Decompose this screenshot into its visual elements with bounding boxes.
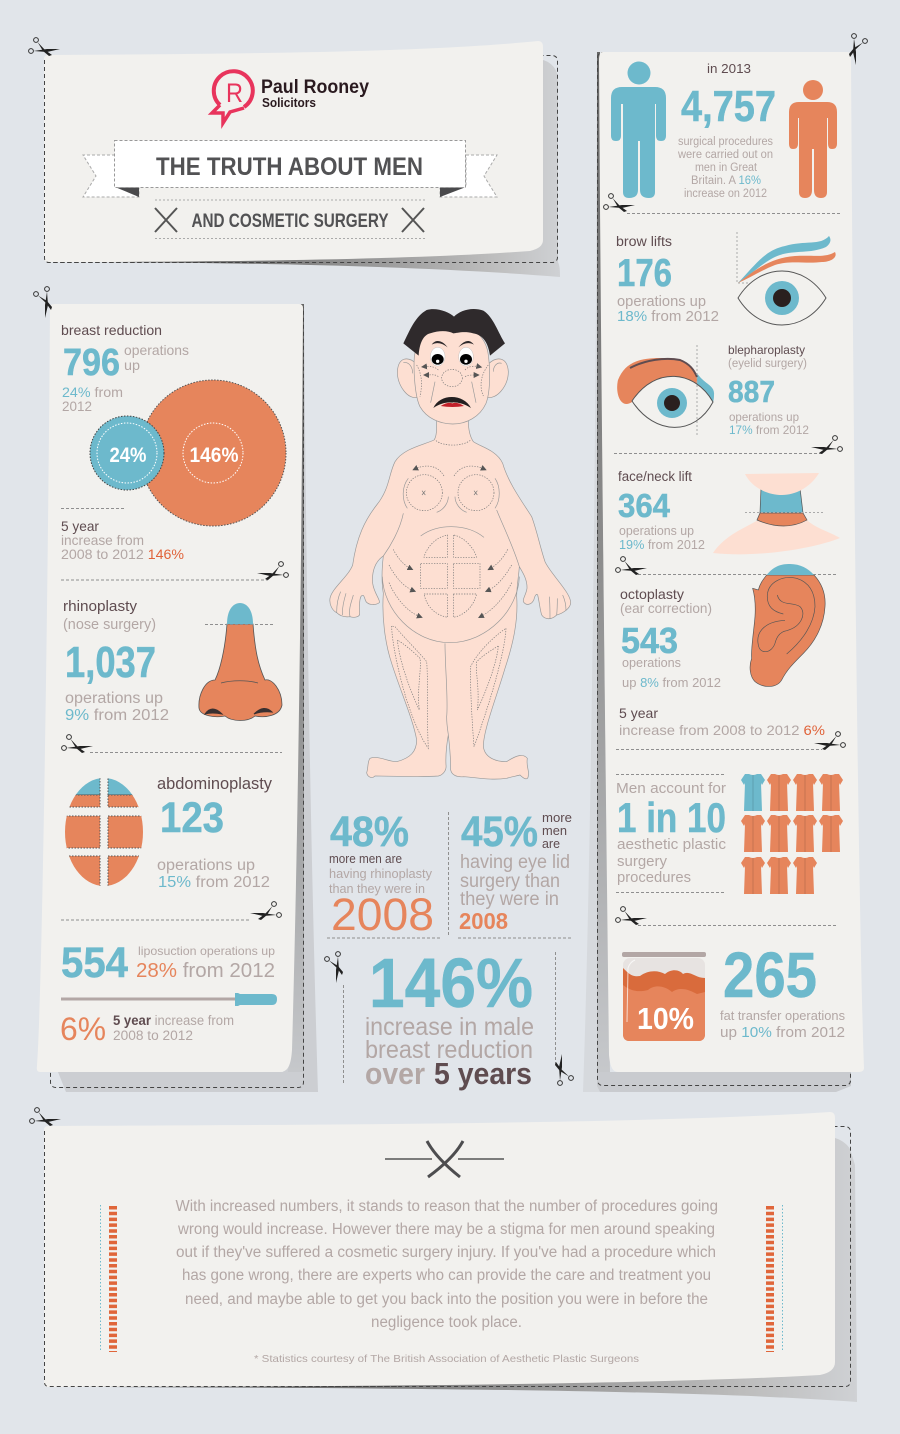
conclusion text: out if they've suffered a cosmetic surgery injury. If you've had a procedure which [176,1244,716,1261]
stat: 146%: 5 years [434,1056,532,1091]
icon: fat jar [622,952,706,1041]
stat: 45% eye lid: are [542,837,560,851]
liposuction stat: liposuction operations up [138,944,275,958]
stat: 48% rhinoplasty: having rhinoplasty [329,866,432,881]
ear 5 year stat [619,705,825,738]
blepharoplasty stat: (eyelid surgery) [728,358,807,370]
stat: 48% rhinoplasty: 2008 [331,889,434,940]
head [414,324,490,424]
breast reduction stat: 24% from [62,384,123,400]
conclusion dashed left and bottom edge [44,1131,400,1386]
venn circles: 146% [190,444,239,467]
conclusion text: With increased numbers, it stands to reason that the number of procedures going [176,1198,718,1215]
figure: man [330,309,571,779]
icon: ear [750,564,825,686]
icon: crossed scalpels [385,1141,504,1177]
liposuction 5 year: 6% [60,1011,106,1047]
breast reduction stat: 2012 [62,398,92,414]
left paper edge shadow [288,304,304,1072]
conclusion text: wrong would increase. However there may be a stigma for men around speaking [177,1221,715,1238]
icon: gown grid [741,774,843,894]
octoplasty stat: 543 [621,620,678,661]
scissors [616,907,647,925]
panel: header [29,38,560,277]
brow lifts stat: 18% from 2012 [617,309,719,325]
ear 5 year stat: increase from 2008 to 2012 6% [619,722,825,738]
scissors [814,732,845,750]
abdominoplasty stat: 15% from 2012 [158,874,270,891]
octoplasty stat: operations [622,655,681,670]
brow lifts stat [616,234,719,325]
octoplasty stat [620,586,721,690]
scissors [555,1054,573,1085]
octoplasty stat: octoplasty [620,586,684,602]
right paper [599,52,864,1072]
panel: left statistics [34,287,318,1092]
left dashed outline [50,304,304,1088]
side stitches right [770,1205,782,1352]
scissors [604,194,635,212]
face/neck lift stat [618,469,705,552]
stat: 45% eye lid: having eye lid [460,852,570,873]
octoplasty stat: up 8% from 2012 [622,675,721,690]
subtitle [155,200,425,238]
face/neck lift stat: face/neck lift [618,469,692,484]
title ribbon: THE TRUTH ABOUT MEN [156,153,423,181]
fat transfer stat: 265 [723,939,817,1011]
1 in 10 stat: surgery [617,853,667,870]
header dashed outline [44,56,558,262]
1 in 10 stat: procedures [617,869,691,886]
left paper [37,304,303,1072]
venn circles: 24% [110,444,147,467]
conclusion text: has gone wrong, there are experts who can provide the care and treatment you [182,1267,711,1284]
breast reduction stat [61,322,189,414]
scissors [616,557,647,575]
face/neck lift stat: operations up [619,524,694,538]
abdominoplasty stat [157,775,273,891]
liposuction 5 year [60,1011,234,1047]
icon: Paul Rooney logo: R [226,78,243,108]
5 year stat: 5 year [61,518,99,534]
header paper [44,41,543,262]
right paper edge shadow [597,52,610,1072]
eyes [430,341,474,366]
in 2013 stat: increase on 2012 [684,188,767,200]
scissors [250,902,281,920]
icon: Paul Rooney logo: Paul Rooney [261,77,369,98]
icon: abdomen [65,778,143,886]
fat transfer stat: up 10% from 2012 [720,1024,845,1041]
right paper shadow [597,1072,851,1092]
icon: Paul Rooney logo [212,71,369,123]
icon: neck [713,473,840,554]
scissors top [849,34,867,65]
icon: blepharoplasty eye [617,345,714,435]
conclusion text [176,1198,718,1331]
scissors [325,952,343,983]
scissors [811,436,842,454]
icon: blue man [611,62,666,198]
scissors [30,1108,61,1126]
face/neck lift stat: 19% from 2012 [619,538,705,552]
icon: Paul Rooney logo: Solicitors [262,96,316,110]
header dashed left and bottom edge [44,60,300,262]
conclusion dashed outline [44,1126,850,1386]
octoplasty stat: (ear correction) [620,600,712,616]
stat: 45% eye lid: 45% [461,808,538,856]
in 2013 stat: in 2013 [707,61,751,76]
1 in 10 stat: 1 in 10 [617,794,726,841]
breast reduction stat: 796 [63,342,120,384]
mouth [433,397,471,408]
conclusion text: need, and maybe able to get you back into the position you were in before the [185,1291,708,1308]
blepharoplasty stat: operations up [729,410,799,424]
rhinoplasty stat: rhinoplasty [63,598,138,615]
liposuction stat: 28% from 2012 [136,960,275,982]
stat: 48% rhinoplasty: than they were in [329,881,425,896]
rhinoplasty stat: 1,037 [65,638,156,687]
in 2013 stat [677,61,776,200]
blepharoplasty stat: 17% from 2012 [729,423,809,437]
side stitches left [100,1205,113,1352]
breast reduction stat: operations [124,342,189,358]
stat: 45% eye lid: 2008 [459,908,508,934]
body [330,421,571,779]
fat transfer stat: fat transfer operations [720,1008,845,1023]
liposuction stat: 554 [61,939,128,987]
stat: 146%: increase in male [365,1013,534,1041]
stat: 45% eye lid: surgery than [460,871,560,892]
blepharoplasty stat: 887 [728,374,775,409]
hair [403,309,505,356]
liposuction 5 year: 2008 to 2012 [113,1028,193,1043]
stat: 45% eye lid: more [542,811,572,825]
stat: 146% [365,944,534,1091]
rhinoplasty stat [63,598,169,724]
icon: scalpel [61,993,277,1006]
fat transfer stat [720,939,845,1041]
in 2013 stat: 4,757 [681,82,776,131]
body lines [337,362,566,735]
stat: 45% eye lid: men [542,824,567,838]
stat: 45% eye lid: they were in [460,889,559,910]
5 year stat: increase from [61,532,144,548]
5 year stat: 2008 to 2012 146% [61,546,184,562]
in 2013 stat: men in Great [695,162,758,174]
scissors [257,562,288,580]
brow lifts stat: brow lifts [616,234,672,249]
abdominoplasty stat: 123 [160,794,224,842]
rhinoplasty stat: operations up [65,690,163,707]
blepharoplasty stat: blepharoplasty [728,343,805,357]
left paper shadow [58,304,318,1092]
footnote: * Statistics courtesy of The British Association of Aesthetic Plastic Surgeons [254,1353,639,1365]
stat: 48% rhinoplasty [329,808,434,940]
rhinoplasty stat: 9% from 2012 [65,707,169,724]
surgery marks [389,365,512,748]
abdominoplasty stat: abdominoplasty [157,775,273,793]
right dashed outline [598,52,850,1086]
in 2013 stat: were carried out on [677,149,773,161]
icon: scissors [29,38,60,56]
ear 5 year stat: 5 year [619,705,658,721]
breast reduction stat: breast reduction [61,322,162,338]
icon: brow lift eye [737,232,836,325]
conclusion text: negligence took place. [371,1314,522,1331]
venn circles [90,380,286,526]
abdominoplasty stat: operations up [157,857,255,874]
stat: 48% rhinoplasty: 48% [330,808,409,856]
rhinoplasty stat: (nose surgery) [63,616,156,633]
1 in 10 stat: aesthetic plastic [617,836,726,853]
conclusion paper shadow [90,1138,857,1402]
in 2013 stat: Britain. A 16% [691,175,761,187]
5 year stat [61,518,184,562]
breast reduction stat: up [124,357,140,373]
brow lifts stat: operations up [617,294,706,310]
icon: orange man [789,80,837,198]
1 in 10 stat: Men account for [616,780,726,797]
icon: fat jar: 10% [637,1001,694,1036]
stat: 48% rhinoplasty: more men are [329,852,402,866]
liposuction stat [61,939,275,987]
header paper shadow [90,60,560,277]
ears [397,359,417,398]
scissors top [34,287,52,318]
blepharoplasty stat [728,343,809,437]
stat: 146%: 146% [369,944,533,1022]
conclusion paper [44,1112,835,1387]
1 in 10 stat [616,774,726,892]
brow lifts stat: 176 [617,252,672,295]
in 2013 stat: surgical procedures [678,136,773,148]
subtitle: AND COSMETIC SURGERY [192,210,388,232]
scissors [62,735,93,753]
face/neck lift stat: 364 [618,487,671,524]
stat: 146%: over [365,1056,425,1091]
title ribbon [83,140,497,197]
right paper outer shadow [583,60,600,1092]
stat: 146%: breast reduction [365,1036,533,1064]
liposuction 5 year: 5 year increase from [113,1013,234,1028]
panel: conclusion [30,1108,857,1402]
icon: nose [199,603,282,720]
panel: right statistics [583,34,867,1092]
stat: 45% eye lid [459,808,572,934]
